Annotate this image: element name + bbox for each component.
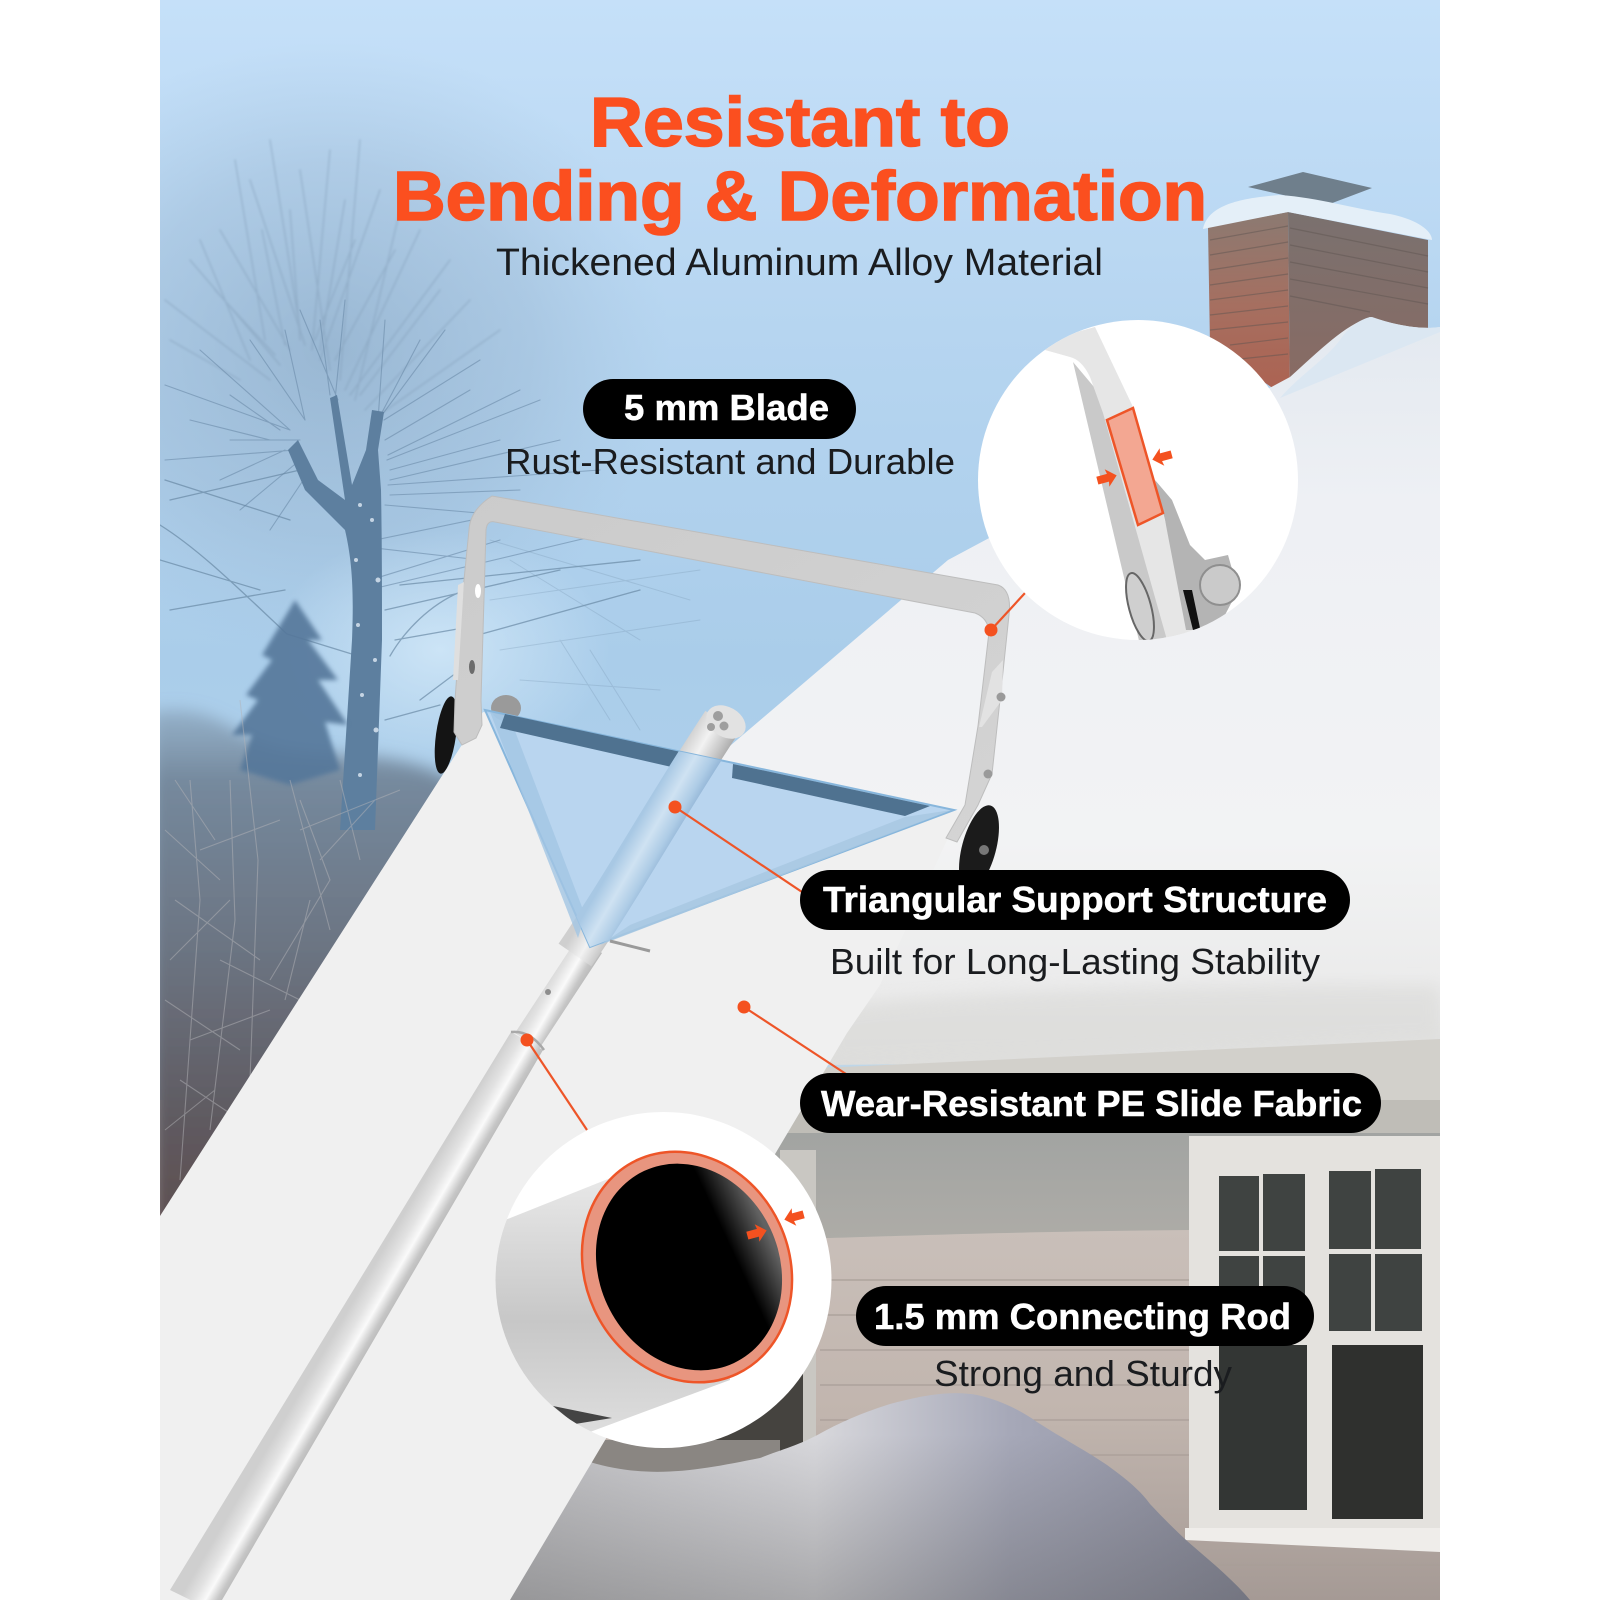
frame bolts xyxy=(469,584,1006,778)
siding wall xyxy=(605,1230,1440,1600)
tube bolts xyxy=(707,711,728,731)
photo background scene xyxy=(160,0,1440,1600)
window sill xyxy=(1185,1528,1440,1552)
arrow left xyxy=(1150,446,1174,468)
leader line: fabric xyxy=(738,1000,846,1074)
callout: connecting rod xyxy=(856,1286,1314,1394)
rod pin xyxy=(545,989,551,995)
title: Bending & Deformation xyxy=(393,157,1207,235)
snow on chimney xyxy=(1203,195,1432,240)
left wheel xyxy=(431,695,461,775)
bracket xyxy=(1155,480,1238,630)
rear wheel hub xyxy=(491,695,521,721)
blue triangle support xyxy=(485,710,954,947)
lower connecting rod xyxy=(170,1032,543,1600)
leader line: triangle xyxy=(668,800,802,892)
callout: PE slide fabric: Wear-Resistant PE Slide Fabric xyxy=(821,1083,1362,1124)
rod wall ring xyxy=(545,1117,829,1417)
cross bar right xyxy=(732,764,930,816)
cross bar left xyxy=(500,714,681,768)
foggy tree crown haze xyxy=(160,117,574,564)
triangle left arm xyxy=(490,712,585,938)
distant forest xyxy=(160,704,445,1216)
sky xyxy=(160,0,1440,1100)
washer xyxy=(1120,570,1160,644)
dark gap xyxy=(1183,590,1200,630)
rod joint xyxy=(511,1032,544,1050)
chimney xyxy=(1203,172,1432,400)
dark door xyxy=(714,1374,803,1451)
arrow left xyxy=(782,1206,806,1228)
chimney right face xyxy=(1288,212,1428,377)
window panes xyxy=(1219,1169,1423,1519)
eave xyxy=(822,1039,1440,1100)
chimney left face xyxy=(1208,212,1290,400)
rake frame xyxy=(454,496,1010,842)
callout: PE slide fabric xyxy=(800,1073,1381,1133)
rod underside shadow xyxy=(553,1406,612,1424)
triangle right arm xyxy=(600,810,952,945)
callout: 5 mm blade: Rust-Resistant and Durable xyxy=(505,441,955,482)
blade side xyxy=(1073,362,1167,645)
callout: connecting rod: Strong and Sturdy xyxy=(934,1353,1232,1394)
leader line: rod xyxy=(520,1034,587,1130)
title: Resistant to xyxy=(590,83,1010,161)
arrow right xyxy=(1095,467,1119,489)
rod hollow xyxy=(563,1133,815,1401)
forest branches xyxy=(165,700,400,1180)
support tube xyxy=(575,722,722,955)
rod body xyxy=(480,1177,730,1440)
brick courses xyxy=(1210,226,1428,360)
upper connecting rod xyxy=(515,937,602,1049)
detail circle: blade thickness xyxy=(978,320,1298,645)
detail circle: rod wall xyxy=(480,1112,832,1448)
upper shaded wall xyxy=(775,1133,1440,1238)
blade face xyxy=(1045,327,1193,640)
snow flecks on trunk xyxy=(354,503,380,777)
roof snow xyxy=(690,317,1440,1065)
tube cap xyxy=(700,699,752,745)
callout: triangular support: Triangular Support Structure xyxy=(823,879,1327,920)
callout: connecting rod: 1.5 mm Connecting Rod xyxy=(874,1296,1291,1337)
callout: 5 mm blade xyxy=(505,379,955,482)
callout: triangular support: Built for Long-Lasting Stability xyxy=(830,941,1320,982)
bare winter tree xyxy=(160,140,700,730)
house xyxy=(592,1039,1440,1600)
right bracket plate xyxy=(979,660,1003,727)
chimney cap xyxy=(1248,172,1372,205)
slide fabric xyxy=(160,712,872,1600)
frost band xyxy=(825,985,1440,1065)
tree trunk and main limbs xyxy=(288,395,384,830)
title xyxy=(393,83,1207,235)
snow rake tool xyxy=(170,496,1010,1600)
left bracket plate xyxy=(453,582,464,680)
door frame xyxy=(780,1150,816,1460)
callout: 5 mm blade: 5 mm Blade xyxy=(624,387,829,428)
bright haze around trunk xyxy=(316,558,569,740)
callout: triangular support xyxy=(800,870,1350,982)
foundation shadow xyxy=(592,1440,780,1472)
right wheel xyxy=(951,801,1007,895)
window frame xyxy=(1189,1136,1449,1532)
thickness marker xyxy=(1107,408,1163,525)
leader line: blade xyxy=(984,593,1025,636)
snow drift by chimney xyxy=(1280,317,1440,398)
pine tree xyxy=(232,600,348,785)
soffit xyxy=(788,1100,1440,1133)
bolt xyxy=(1200,565,1240,605)
snow pile xyxy=(500,1393,1250,1600)
subtitle: Thickened Aluminum Alloy Material xyxy=(496,242,1103,284)
wing bolt xyxy=(610,941,650,951)
tinted tube section xyxy=(576,752,721,947)
arrow right xyxy=(745,1222,769,1244)
